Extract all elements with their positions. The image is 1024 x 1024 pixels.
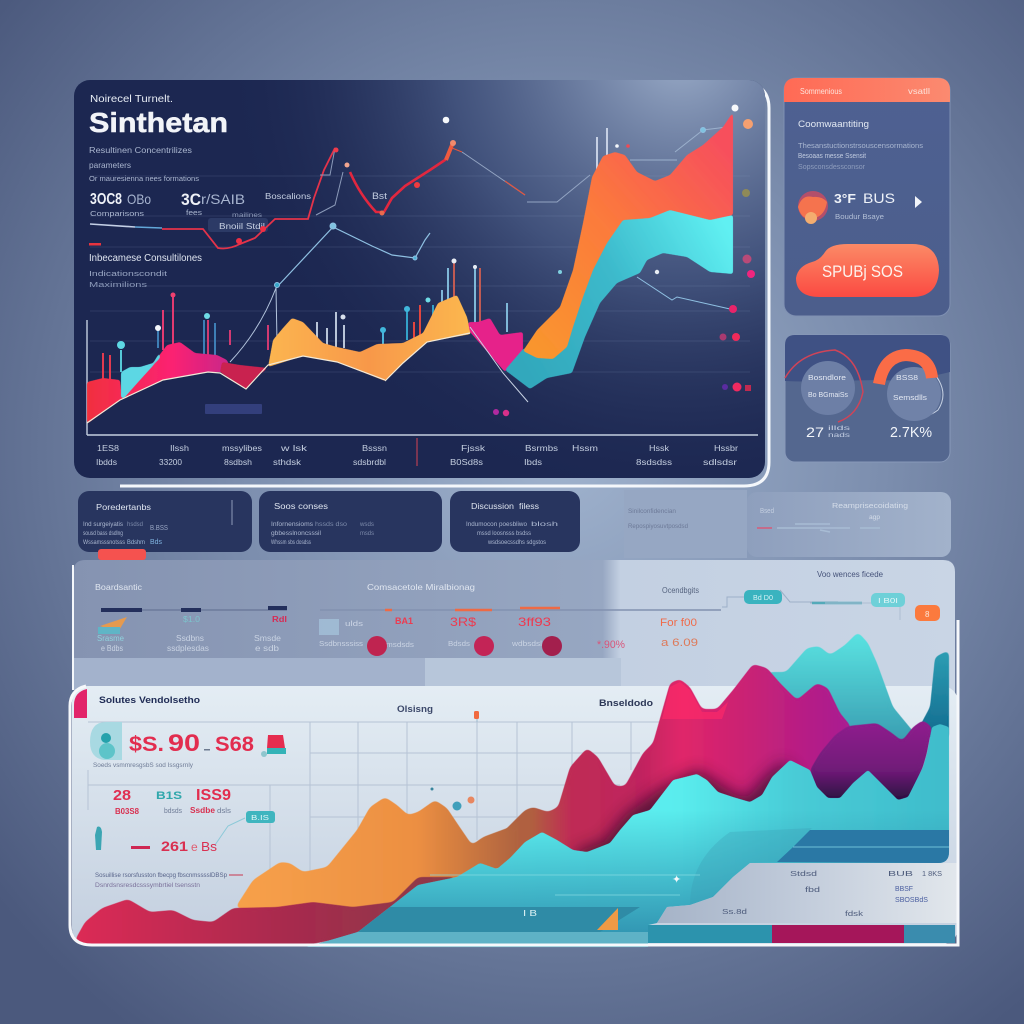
scale marker bar (205, 404, 262, 414)
headline dash (204, 749, 210, 750)
teal callout (215, 811, 275, 845)
column label right: Bnseldodo (599, 698, 653, 709)
card two: wsds (359, 522, 374, 528)
axis labels: Hssbr (714, 444, 738, 453)
spike markers (103, 128, 607, 380)
button (796, 244, 939, 297)
footnote (95, 872, 243, 889)
timeline figures: ssdplesdas (167, 644, 209, 653)
secondary figures: bdsds (164, 808, 182, 815)
card three: mssd loosnsss bsdss (477, 530, 532, 537)
gauge left: Bosndlore (808, 373, 846, 382)
card three: Indumocon poesbliwo (466, 521, 527, 528)
intro text: parameters (89, 160, 131, 170)
icon: droplet badge (90, 722, 122, 760)
panel: main chart (74, 80, 769, 486)
timeline headings: Comsacetole Miralbionag (367, 582, 475, 592)
section subheading: Maximilions (89, 282, 148, 289)
secondary figures: Ssdbe (190, 806, 216, 815)
gauge left: Bo BGmaiSs (808, 392, 848, 399)
gauge right: BSS8 (896, 373, 918, 382)
intro text: Resultinen Concentrilizes (89, 145, 192, 155)
card text: Thesanstuctionstrsouscensormations (798, 143, 924, 150)
timeline figures: e sdb (255, 644, 280, 653)
corner tab (74, 689, 87, 718)
card two (259, 491, 442, 552)
area: far right teal (915, 650, 949, 740)
crimson shading along ridge (578, 770, 790, 862)
area: red-pink (87, 342, 232, 424)
left border (72, 565, 74, 690)
marker tick (416, 438, 418, 466)
right labels: 1 8KS (922, 869, 942, 878)
pink edge line (470, 327, 528, 402)
area: large teal (505, 209, 733, 389)
secondary figures: 28 (113, 787, 131, 804)
key figures (90, 190, 388, 219)
card three (450, 491, 580, 552)
timeline headings: Boardsantic (95, 582, 143, 592)
right labels: BBSF (895, 884, 913, 893)
key figures: 3C (181, 190, 201, 209)
secondary figures: dsls (217, 808, 232, 815)
right labels: SBOSBdS (895, 895, 928, 904)
axis labels: Ilssh (170, 444, 189, 453)
panel surface (72, 686, 958, 944)
timeline pills: 8 (925, 610, 930, 619)
timeline figures: $1.0 (183, 615, 201, 624)
icon: teal pin (95, 827, 102, 850)
timeline track (101, 590, 900, 620)
spike marker dots (117, 104, 755, 416)
right labels: fdsk (845, 909, 863, 918)
card one: Bdshm (127, 540, 145, 546)
key figures: r/SAIB (201, 191, 245, 207)
star marker: ✦ (672, 874, 681, 886)
main panel frame (120, 82, 769, 486)
gauge left: illds (828, 426, 850, 432)
card header (784, 78, 950, 102)
timeline figures (97, 615, 287, 653)
area: magenta dip (220, 362, 268, 389)
secondary figures (113, 787, 232, 816)
crimson peak highlight (662, 682, 728, 719)
timeline metrics: msdsds (386, 642, 415, 649)
card heading: Coomwaantiting (798, 119, 869, 130)
card header: vsatll (908, 87, 930, 96)
teal bands (307, 828, 949, 947)
red pill (98, 549, 146, 560)
timeline headings (95, 569, 883, 595)
card figure: BUS (863, 190, 895, 206)
teal bar label: I B (523, 909, 537, 918)
axis labels: 1ES8 (97, 444, 120, 453)
timeline pills (744, 590, 940, 621)
card one: B.BSS (150, 525, 168, 532)
right labels: BUB (888, 869, 913, 878)
timeline figures: Srasme (97, 634, 125, 643)
card figure: Boudur Bsaye (835, 212, 884, 221)
card one: Bds (150, 539, 162, 546)
key figures: OBo (127, 191, 151, 207)
card one: Ind surgeiyatis (83, 521, 124, 528)
ghost card right: Bsed (760, 508, 774, 515)
intro text (89, 145, 200, 183)
axis labels: mssylibes (222, 444, 262, 453)
headline figures: S68 (215, 733, 254, 756)
header label: Noirecel Turnelt. (90, 94, 173, 105)
card two: Whssm sbs dosdss (271, 539, 312, 546)
secondary figures: B03S8 (115, 807, 140, 816)
timeline figures: e Bdbs (101, 644, 123, 653)
grey panel foot (648, 863, 958, 923)
axis labels: sthdsk (273, 458, 302, 467)
card one: Wssamsssnotsss (83, 539, 126, 546)
key figures: 3OC8 (90, 191, 122, 208)
chart axes (87, 320, 758, 435)
timeline metrics: 3ff93 (518, 615, 551, 629)
card one (78, 491, 252, 552)
ghost card right: Reamprisecoidating (832, 501, 908, 510)
axis labels: sdlsdsr (703, 458, 737, 467)
card header: Sommenious (800, 87, 842, 96)
headline figures (129, 730, 254, 757)
blue line series (230, 127, 730, 362)
area: crimson foreground (75, 877, 457, 945)
axis labels: 8sdbsh (224, 458, 252, 467)
card three: filess (519, 502, 539, 511)
axis labels: 33200 (159, 458, 183, 467)
timeline headings: Voo wences ficede (817, 569, 883, 579)
card row (78, 490, 951, 560)
key figures: mailines (232, 212, 263, 219)
axis labels: Ibds (524, 458, 542, 467)
button: SPUBj SOS (822, 262, 903, 281)
timeline metrics: 3R$ (450, 615, 476, 629)
timeline pills: Bd D0 (753, 595, 773, 602)
area: rear teal (745, 632, 925, 760)
figure row (161, 838, 218, 854)
ghost card left: Sinilconfidencian (628, 508, 676, 515)
area edge highlight (87, 333, 470, 423)
key figures: Bst (372, 191, 388, 201)
icon: red cup (261, 735, 286, 757)
main panel surface (74, 80, 765, 478)
gauge right (879, 355, 943, 441)
timeline metrics: For f00 (660, 617, 697, 629)
icon: play arrow (915, 196, 922, 208)
card two: gbbesslnoncsssil (271, 530, 322, 537)
icon: avatar blob (798, 191, 828, 224)
figure row: 261 (161, 838, 188, 854)
section subheading: Indicationscondit (89, 271, 167, 278)
right labels (722, 869, 942, 918)
panel: timeline (73, 560, 955, 740)
lower strip (74, 658, 621, 690)
callout label: Bnoiil Stdil (219, 222, 265, 231)
card one: sousd bass dsdlng (83, 530, 123, 537)
card two: Soos conses (274, 502, 328, 511)
axis labels: Hssk (649, 444, 670, 453)
timeline metrics (319, 615, 698, 651)
footnote: Sosuillise rsorsfusston fbecpg fbscnmsssslDBSp (95, 872, 227, 879)
timeline headings: Ocendbgits (662, 585, 699, 595)
red line series (90, 140, 590, 248)
figure row: e (191, 840, 198, 854)
timeline pills: I B0I (878, 598, 898, 605)
timeline metrics: *.90% (597, 639, 625, 651)
gauge right: 2.7K% (890, 424, 932, 441)
frame (70, 620, 958, 945)
key figures: Boscalions (265, 192, 311, 201)
gauge band (785, 335, 950, 382)
timeline metrics: wdbsdsl (511, 641, 543, 648)
axis labels: sdsbrdbl (353, 458, 386, 467)
timeline figures: Rdl (272, 615, 287, 624)
area: cyan (121, 352, 160, 398)
figure row: Bs (201, 839, 218, 854)
card figure (834, 190, 895, 221)
panel: plan card (784, 78, 950, 316)
card two: Infornensioms (271, 521, 314, 528)
right labels: Ss.8d (722, 907, 747, 916)
axis labels (96, 444, 738, 467)
area: crimson ridge (500, 664, 855, 900)
card three: blosh (531, 521, 559, 528)
timeline metrics: Ssdbnsssiss (319, 641, 364, 648)
right labels: Stdsd (790, 869, 817, 878)
intro text: Or mauresienna nees formations (89, 176, 200, 183)
area: purple (810, 720, 932, 804)
timeline metrics: a 6.09 (661, 637, 698, 649)
axis labels: B0Sd8s (450, 458, 483, 467)
axis labels: Fjssk (461, 444, 486, 453)
callout label (208, 218, 268, 232)
card one: Poredertanbs (96, 503, 151, 512)
heading: Solutes Vendolsetho (99, 695, 200, 706)
minus (131, 846, 150, 849)
area: teal front (307, 724, 949, 947)
timeline metrics: Bdsds (448, 641, 471, 648)
right labels: fbd (805, 885, 820, 894)
card one: hsdsd (127, 522, 143, 528)
ghost card right: agp (869, 514, 880, 521)
teal callout: B.IS (251, 815, 269, 822)
column label left: Olsisng (397, 704, 433, 715)
bottom colour bar (648, 925, 955, 943)
axis labels: Hssm (572, 444, 598, 453)
headline figures: $S. (129, 733, 164, 756)
title: Sinthetan (89, 107, 228, 138)
small markers (430, 711, 479, 810)
timeline metrics: ulds (345, 621, 364, 628)
secondary figures: B1S (156, 790, 182, 802)
timeline metrics: BA1 (395, 616, 413, 626)
card two: hssds dso (315, 522, 348, 528)
section subheading: Inbecamese Consultilones (89, 253, 202, 264)
axis labels: Bsrmbs (525, 444, 558, 453)
axis labels: Ibdds (96, 458, 117, 467)
area: large orange (523, 112, 733, 359)
timeline figures: Ssdbns (176, 634, 204, 643)
gauge left: 27 (806, 424, 824, 440)
icon: timeline badges (367, 636, 562, 656)
panel: gauges (785, 335, 950, 462)
secondary figures: ISS9 (196, 787, 231, 804)
card text (798, 143, 924, 171)
axis labels: 8sdsdss (636, 458, 672, 467)
card three: wsdsoecssdhs sdgstos (487, 539, 547, 546)
area: amber (268, 295, 471, 381)
footnote: Dsnrdsnsresdcsssymbrtiel tsensstn (95, 882, 200, 889)
grid lines (88, 722, 660, 880)
area: orange ridge (235, 797, 518, 915)
headline figures: 90 (168, 730, 200, 757)
key figures: Comparisons (90, 211, 145, 218)
panel: bottom chart (70, 620, 958, 947)
ghost card left (624, 490, 747, 558)
gauge left (785, 350, 863, 440)
axis labels: w lsk (280, 444, 308, 453)
timeline figures: Smsde (254, 634, 282, 643)
grid lines (90, 176, 750, 372)
section subheading (89, 243, 202, 289)
gauge left: nads (828, 433, 850, 439)
key figures: fees (186, 210, 203, 217)
card three: Discussion (471, 502, 514, 511)
orange marker triangle (597, 908, 618, 930)
card text: Sopsconsdessconsor (798, 164, 866, 171)
sub caption: Soeds vsmmresgsbS sod Issgsrnly (93, 762, 194, 769)
card two: msds (360, 531, 374, 537)
card figure: 3°F (834, 191, 856, 206)
card text: Besoaas messe Ssensit (798, 153, 866, 160)
gauge right: Semsdlls (893, 393, 927, 402)
area: pink peak (468, 318, 523, 372)
axis labels: Bsssn (362, 444, 387, 453)
ghost card right (747, 492, 951, 557)
ghost card left: Repospiyosuvtposdsd (628, 523, 688, 530)
